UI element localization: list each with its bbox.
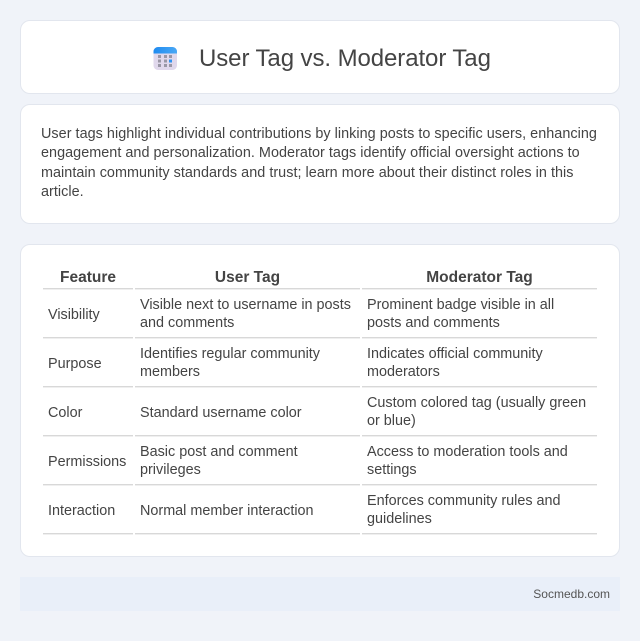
panel: comparison table: Enforces community rules and — [367, 493, 561, 509]
title: User Tag vs. Moderator Tag — [199, 45, 491, 72]
row: Visibility: Visibility — [48, 307, 100, 323]
row: Permissions: Permissions — [48, 454, 126, 470]
panel: comparison table: Standard username color — [140, 405, 302, 421]
table header: Feature: Feature — [60, 269, 116, 286]
panel: comparison table: or blue) — [367, 413, 416, 429]
panel: intro text — [20, 104, 620, 224]
intro paragraph: engagement and personalization. Moderator tags identify official oversight actions to — [41, 145, 580, 161]
intro paragraph: article. — [41, 184, 84, 200]
footer — [20, 577, 620, 611]
panel: comparison table: members — [140, 364, 200, 380]
panel: comparison table: Prominent badge visible in all — [367, 297, 554, 313]
intro paragraph: User tags highlight individual contributions by linking posts to specific users, enhancing — [41, 126, 597, 142]
row: Color: Color — [48, 405, 82, 421]
table header: Moderator Tag: Moderator Tag — [426, 269, 533, 286]
panel: comparison table: moderators — [367, 364, 440, 380]
panel: comparison table: and comments — [140, 315, 234, 331]
panel: comparison table: Custom colored tag (usually green — [367, 395, 586, 411]
intro paragraph — [41, 126, 597, 200]
row: Interaction: Interaction — [48, 503, 115, 519]
panel: comparison table: Normal member interaction — [140, 503, 314, 519]
panel: comparison table: privileges — [140, 462, 201, 478]
panel: comparison table: Visible next to username in posts — [140, 297, 351, 313]
panel: comparison table: settings — [367, 462, 417, 478]
table header: User Tag: User Tag — [215, 269, 280, 286]
row: Purpose: Purpose — [48, 356, 102, 372]
footer text: Socmedb.com — [533, 587, 610, 601]
panel: comparison table: posts and comments — [367, 315, 500, 331]
intro paragraph: maintain community standards and trust; learn more about their distinct roles in this — [41, 165, 573, 181]
panel: header — [20, 20, 620, 94]
panel: comparison table: guidelines — [367, 511, 432, 527]
panel: comparison table: Access to moderation tools and — [367, 444, 568, 460]
icon: calendar — [154, 47, 177, 70]
panel: comparison table: Identifies regular community — [140, 346, 320, 362]
panel: comparison table: Indicates official community — [367, 346, 543, 362]
panel: comparison table: Basic post and comment — [140, 444, 298, 460]
